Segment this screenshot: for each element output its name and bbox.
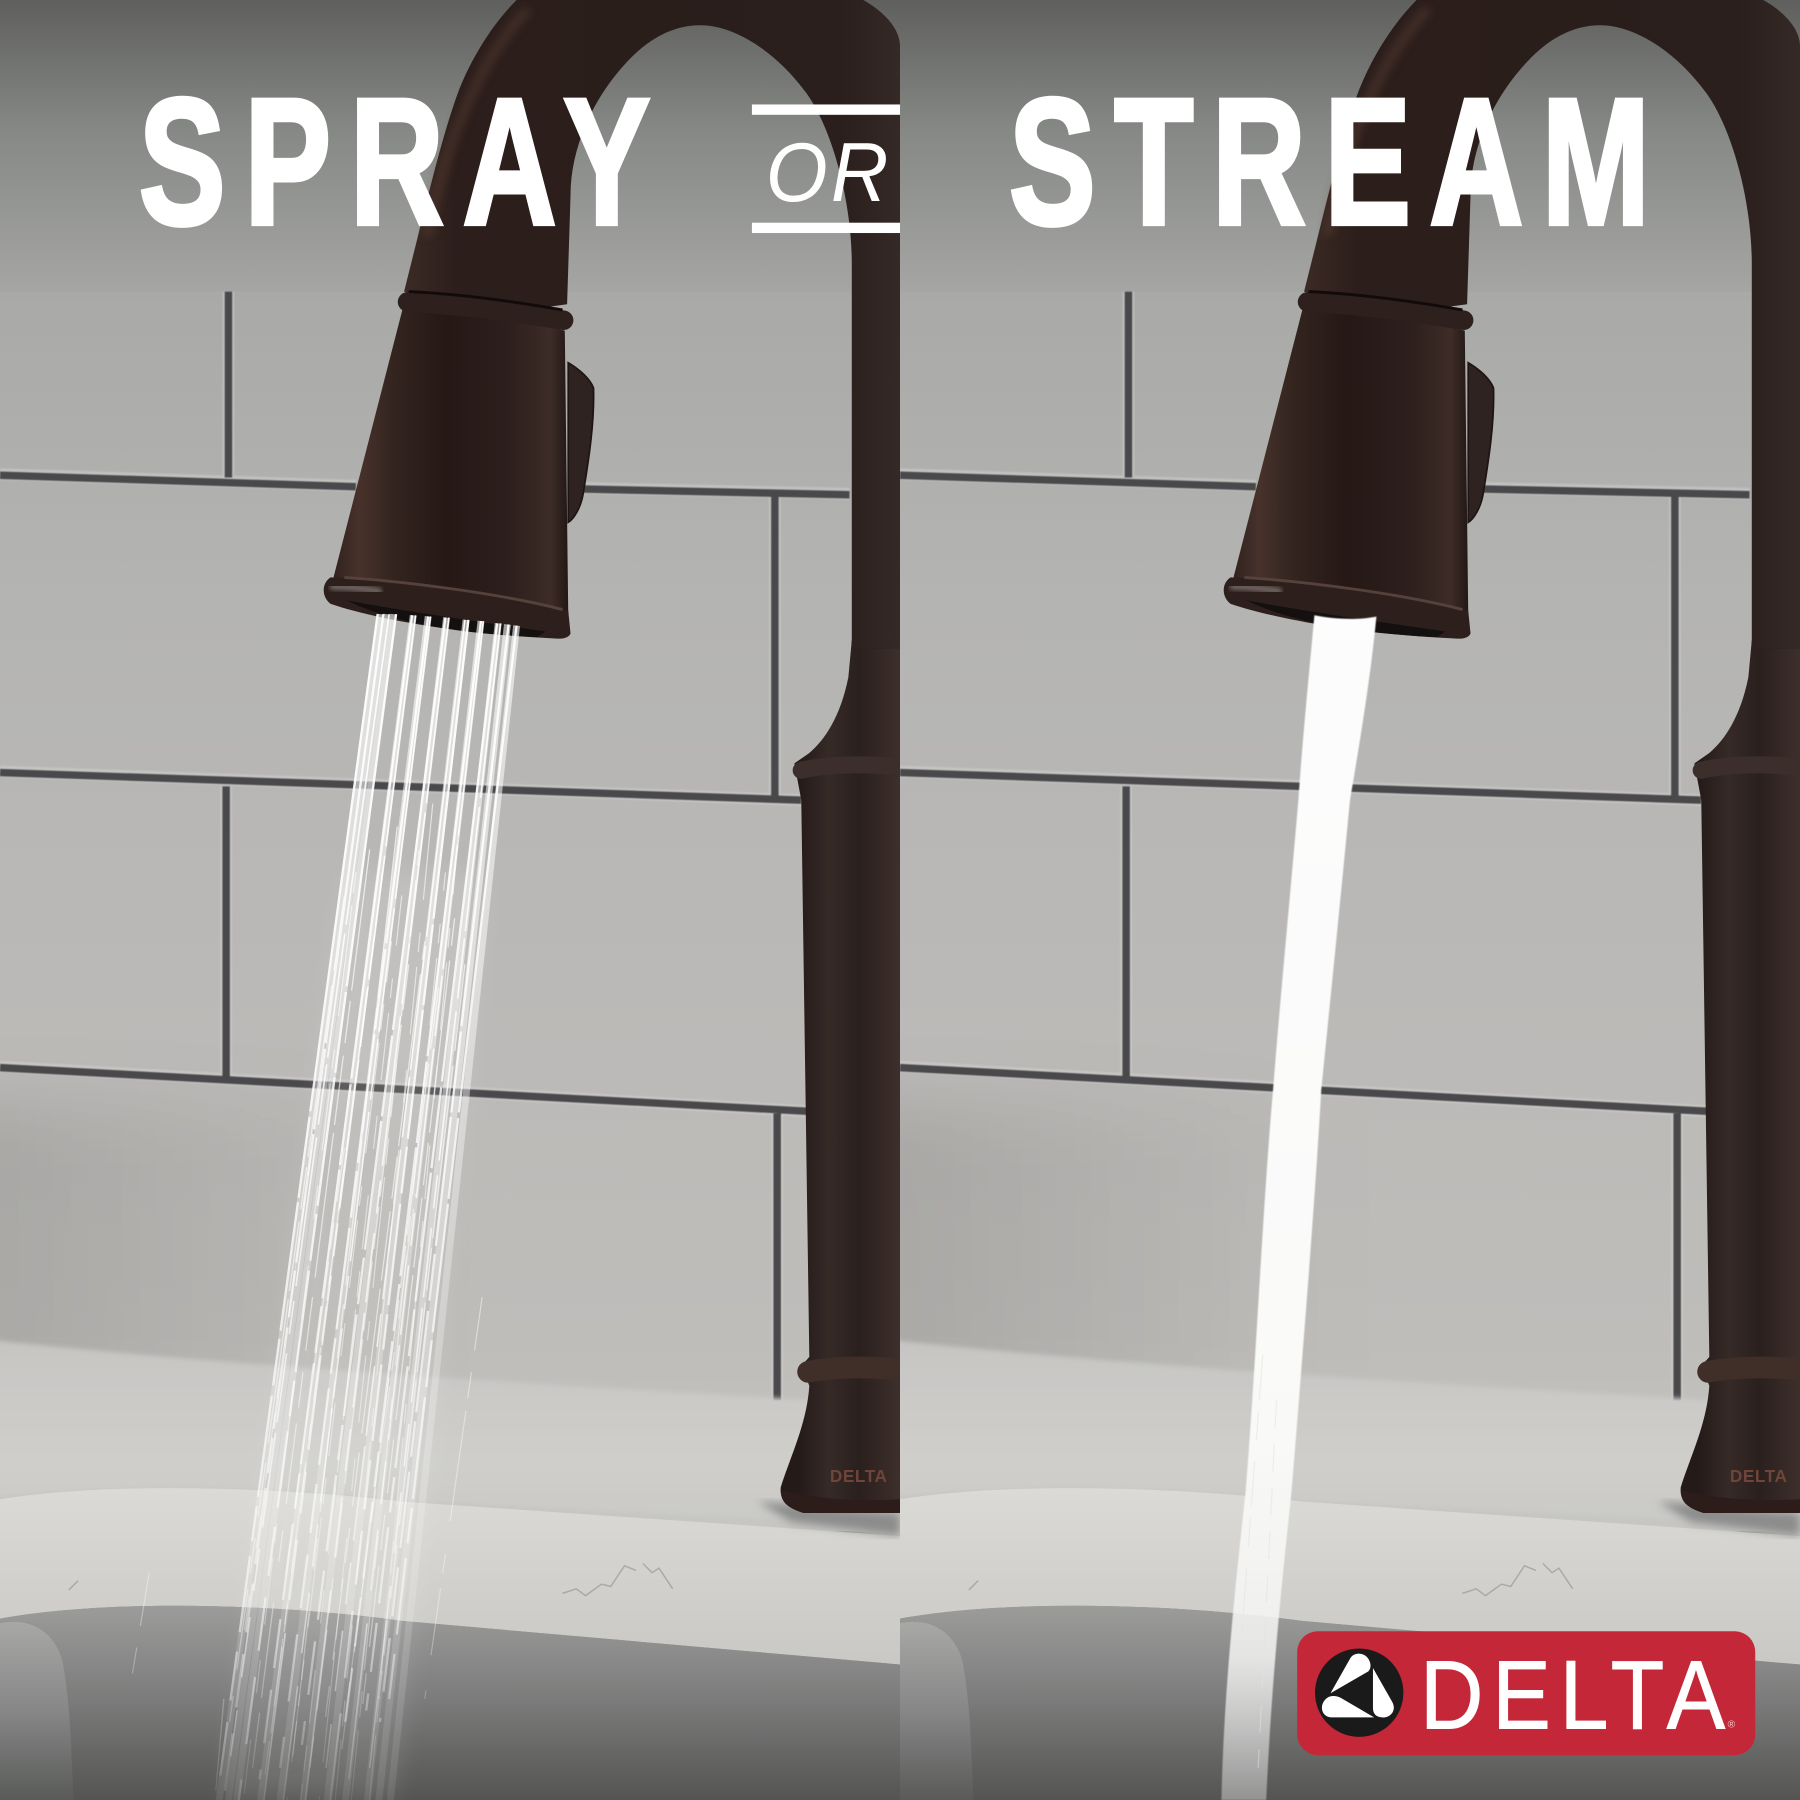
spray fine droplets: [132, 804, 482, 1800]
spray mist haze: [224, 872, 488, 1800]
title: STREAM: STREAM: [1009, 62, 1668, 263]
icon: Delta emblem: [1315, 1648, 1403, 1737]
connector: OR with rules: [752, 104, 900, 233]
nozzle face: [347, 600, 545, 637]
faucet stem column: [781, 641, 900, 1513]
upper wall: [0, 0, 900, 296]
spray jets: [219, 614, 517, 1800]
spout collar: [408, 302, 564, 320]
rule top: [752, 104, 900, 115]
sprayer head body: [333, 308, 568, 614]
marble veins: [69, 1564, 673, 1596]
panel: left kitchen scene with faucet: [0, 0, 930, 1800]
subway tile wall: [0, 292, 900, 1531]
registered mark: ®: [1728, 1720, 1736, 1731]
rule bottom: [752, 223, 900, 233]
neck joint: [852, 641, 900, 649]
OR label: OR: [766, 126, 892, 219]
rim shine: [333, 587, 379, 591]
stem ring bottom: [808, 1368, 900, 1372]
title: SPRAY: SPRAY: [139, 62, 669, 263]
logo: Delta badge: [1297, 1631, 1755, 1755]
stem ring top: [801, 765, 900, 770]
spray core strands: [217, 614, 517, 1800]
water: spray pattern: [132, 614, 517, 1800]
water: solid stream: [1221, 615, 1376, 1800]
base foot ring: [781, 1490, 900, 1513]
sink corner: [0, 1622, 73, 1800]
countertop front edge: [0, 1488, 900, 1665]
spout highlight: [427, 9, 528, 235]
faucet arched spout: [404, 0, 900, 649]
sink basin: [0, 1606, 900, 1800]
base engraving: DELTA: [830, 1466, 888, 1486]
tile edge highlights: [0, 292, 849, 1401]
base shadow on counter: [758, 1502, 900, 1536]
panel: right kitchen scene with faucet: [831, 0, 1800, 1800]
wordmark: DELTA: [1420, 1640, 1734, 1750]
badge background: [1297, 1631, 1755, 1755]
rim highlight line: [344, 577, 562, 610]
stream texture: [1242, 1355, 1277, 1768]
countertop surface: [0, 1337, 930, 1544]
shaded lower left wall: [0, 1102, 459, 1401]
stream body: [1221, 615, 1376, 1800]
collar seam: [409, 292, 562, 310]
sprayer toggle button: [568, 363, 594, 522]
sprayer rim: [324, 577, 571, 639]
tile grout lines: [0, 292, 849, 1401]
